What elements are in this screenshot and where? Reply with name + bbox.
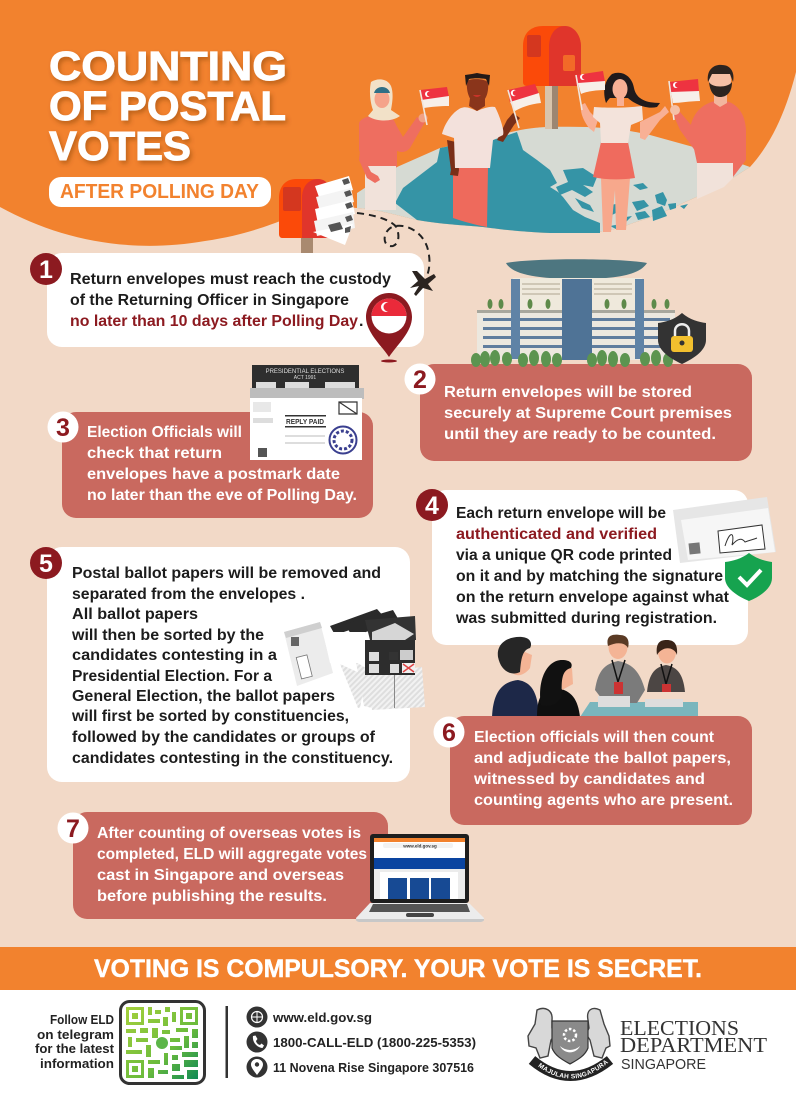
badge 1: 1 xyxy=(39,256,53,284)
title: OF POSTAL xyxy=(49,83,286,129)
badge 6: 6 xyxy=(442,719,456,747)
icon: reply paid envelope: REPLY PAID xyxy=(286,419,324,426)
address xyxy=(246,1056,474,1078)
Elections Department wordmark: ELECTIONS xyxy=(620,1016,739,1040)
flag 4 xyxy=(669,79,700,120)
step 5 text: separated from the envelopes . xyxy=(72,586,305,603)
dashed flight path xyxy=(357,213,429,278)
badge 7: 7 xyxy=(66,815,80,843)
person: woman in hijab xyxy=(359,79,428,210)
person: woman in red skirt xyxy=(581,73,669,232)
step 4 text: authenticated and verified xyxy=(456,526,657,543)
step 7 text xyxy=(97,825,367,905)
person: man in white shirt xyxy=(442,73,520,227)
panel: step 5 xyxy=(30,547,410,782)
flag 2 xyxy=(508,84,541,128)
step 3 text: no later than the eve of Polling Day. xyxy=(87,487,357,504)
subtitle pill: AFTER POLLING DAY xyxy=(60,181,260,203)
phone: 1800-CALL-ELD (1800-225-5353) xyxy=(273,1035,476,1050)
badge 4: 4 xyxy=(425,492,439,520)
icon: reply paid envelope: PRESIDENTIAL ELECTIONS xyxy=(266,369,344,375)
icon: reply paid envelope xyxy=(250,365,364,460)
official 2 xyxy=(647,640,685,692)
address: 11 Novena Rise Singapore 307516 xyxy=(273,1060,474,1075)
step 4 text xyxy=(455,505,730,627)
Elections Department wordmark: SINGAPORE xyxy=(621,1056,706,1073)
step 3 text xyxy=(87,424,357,504)
step 3 text: Election Officials will xyxy=(87,424,242,441)
website: www.eld.gov.sg xyxy=(272,1010,372,1025)
title: COUNTING xyxy=(49,43,287,89)
step 5 text: followed by the candidates or groups of xyxy=(72,729,376,746)
step 5 text: Postal ballot papers will be removed and xyxy=(72,565,381,582)
step 3 text: check that return xyxy=(87,445,222,462)
official 1 xyxy=(595,635,645,703)
icon: plane xyxy=(410,271,436,296)
step 5 text xyxy=(71,565,393,767)
title xyxy=(49,43,287,169)
step 5 text: All ballot papers xyxy=(72,606,198,623)
left lion xyxy=(528,1008,556,1058)
icon: tall red mailbox xyxy=(523,26,581,129)
panel: step 6 xyxy=(434,716,752,825)
QR code xyxy=(120,1002,204,1084)
panel: step 4 xyxy=(416,489,748,645)
step 6 text: and adjudicate the ballot papers, xyxy=(474,750,731,767)
islands xyxy=(556,168,597,212)
step 5 text: will first be sorted by constituencies, xyxy=(71,708,349,725)
telegram note: on telegram xyxy=(37,1027,114,1042)
panel: step 2 xyxy=(404,350,752,461)
step 1 text: no later than 10 days after Polling Day xyxy=(70,313,358,330)
flags xyxy=(420,71,700,128)
subtitle pill xyxy=(49,177,271,207)
banner: VOTING IS COMPULSORY. YOUR VOTE IS SECRET. xyxy=(94,955,702,983)
step 1 text: Return envelopes must reach the custody xyxy=(70,271,391,288)
step 4 text: Each return envelope will be xyxy=(456,505,666,522)
icon: small mailbox with envelopes xyxy=(279,176,355,256)
globe illustration xyxy=(357,127,750,233)
step 3 text: envelopes have a postmark date xyxy=(87,466,340,483)
badge 6 xyxy=(434,716,464,748)
contact details xyxy=(246,1006,476,1078)
phone xyxy=(246,1032,476,1052)
icon: reply paid envelope: ACT 1991 xyxy=(294,375,316,381)
telegram note: Follow ELD xyxy=(50,1012,114,1027)
icon: laptop showing ELD website xyxy=(356,834,484,922)
flag 1 xyxy=(420,87,449,125)
badge 7 xyxy=(58,812,88,844)
icon: security shield with padlock xyxy=(658,313,706,364)
step 4 text: on the return envelope against what xyxy=(456,589,730,606)
icon: counting officials scene xyxy=(492,635,698,717)
person: bearded man xyxy=(673,65,746,199)
table xyxy=(580,702,698,717)
step 4 text: on it and by matching the signature xyxy=(456,568,723,585)
step 7 text: completed, ELD will aggregate votes xyxy=(97,846,367,863)
step 7 text: After counting of overseas votes is xyxy=(97,825,361,842)
step 2 text: securely at Supreme Court premises xyxy=(444,405,732,422)
step 1 text xyxy=(70,271,391,330)
telegram note: for the latest xyxy=(35,1041,115,1056)
step 2 text: until they are ready to be counted. xyxy=(444,426,716,443)
header orange wave xyxy=(0,0,796,246)
badge 2 xyxy=(404,364,436,394)
panel: step 1 xyxy=(30,253,424,347)
Singapore state crest xyxy=(527,1008,614,1081)
step 6 text: witnessed by candidates and xyxy=(473,771,705,788)
step 7 text: before publishing the results. xyxy=(97,888,327,905)
telegram note xyxy=(35,1012,115,1071)
title: VOTES xyxy=(49,123,191,169)
Elections Department wordmark: DEPARTMENT xyxy=(620,1033,767,1057)
step 7 text: cast in Singapore and overseas xyxy=(97,867,344,884)
icon: laptop showing ELD website: www.eld.gov.sg xyxy=(402,844,437,848)
step 4 text: via a unique QR code printed xyxy=(456,547,672,564)
badge 2: 2 xyxy=(413,366,427,394)
telegram note: information xyxy=(40,1056,114,1071)
badge 3 xyxy=(48,412,78,442)
panel: step 7 xyxy=(58,812,388,919)
badge 5 xyxy=(30,547,62,579)
banner xyxy=(0,947,796,990)
icon: Supreme Court building xyxy=(477,259,675,360)
icon: signed envelope xyxy=(673,497,776,563)
step 5 text: Presidential Election. For a xyxy=(72,668,272,685)
step 1 text: . xyxy=(359,313,363,330)
building trees xyxy=(471,350,673,367)
step 2 text: Return envelopes will be stored xyxy=(444,384,692,401)
badge 4 xyxy=(416,489,448,521)
website xyxy=(246,1006,372,1028)
icon: Singapore location pin xyxy=(366,293,412,362)
footer background xyxy=(0,990,796,1102)
icon: ballot papers and envelope xyxy=(284,609,425,710)
Elections Department wordmark xyxy=(620,1016,767,1073)
divider xyxy=(226,1006,228,1078)
person seen from back xyxy=(492,637,539,717)
step 4 text: was submitted during registration. xyxy=(455,610,717,627)
badge 5: 5 xyxy=(39,550,53,578)
step 5 text: candidates contesting in the constituency. xyxy=(72,750,393,767)
step 6 text: counting agents who are present. xyxy=(474,792,733,809)
right lion xyxy=(586,1008,610,1058)
step 1 text: of the Returning Officer in Singapore xyxy=(70,292,349,309)
motto ribbon: MAJULAH SINGAPURA xyxy=(538,1060,608,1078)
icon: green check shield xyxy=(725,553,772,601)
people with flags xyxy=(359,65,746,232)
badge 1 xyxy=(30,253,62,285)
woman seen from back xyxy=(537,660,580,717)
flag 3 xyxy=(576,71,605,110)
step 5 text: candidates contesting in a xyxy=(72,647,277,664)
shield xyxy=(552,1021,588,1064)
step 5 text: will then be sorted by the xyxy=(71,627,264,644)
ballots on table xyxy=(598,696,683,707)
step 6 text: Election officials will then count xyxy=(474,729,715,746)
panel: step 3 xyxy=(48,412,373,518)
step 6 text xyxy=(473,729,733,809)
step 2 text xyxy=(444,384,732,443)
badge 3: 3 xyxy=(56,414,70,442)
step 5 text: General Election, the ballot papers xyxy=(72,688,335,705)
